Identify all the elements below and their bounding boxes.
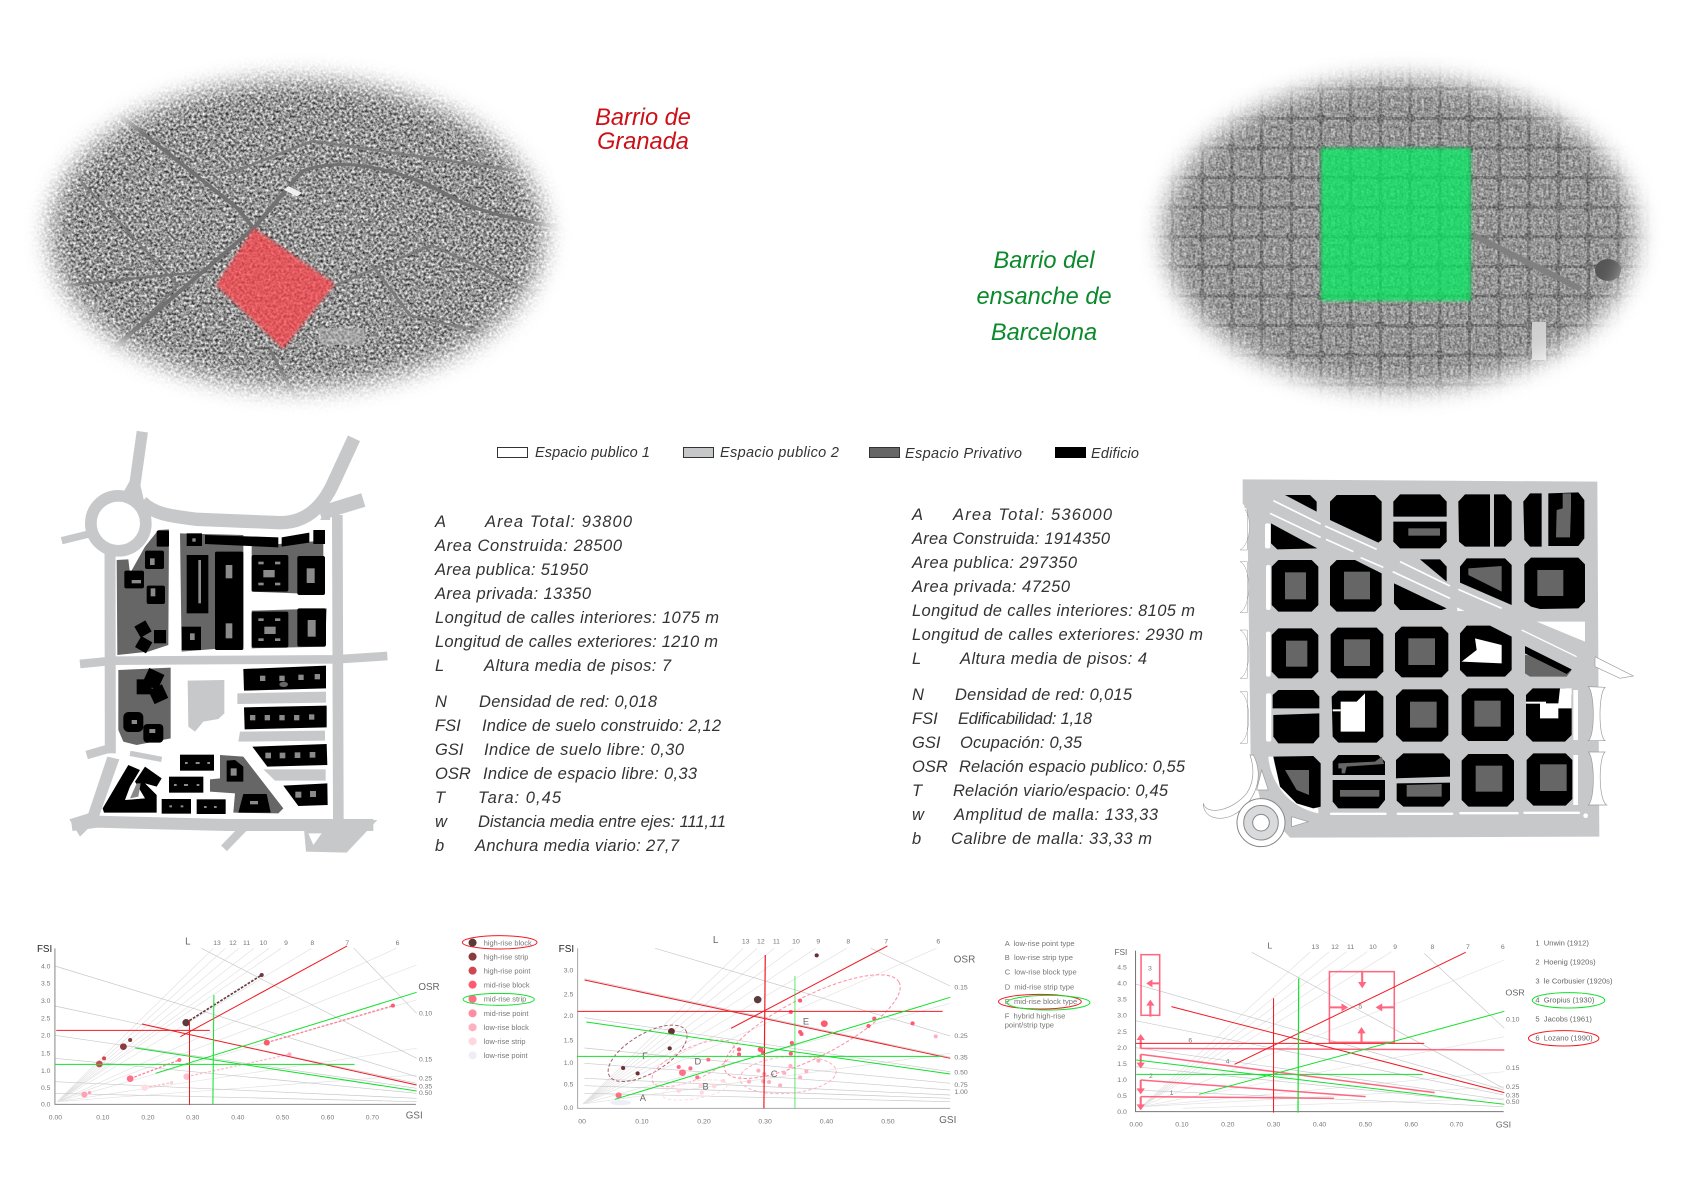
chart 1 axis labels: 11 [243, 940, 250, 947]
chart 2 axis labels: 1.00 [954, 1089, 968, 1096]
chart 1 legend: mid-rise point [484, 1009, 528, 1018]
text block: Granada indicators: b [435, 837, 444, 855]
chart 2 green Barcelona lines [577, 976, 950, 1108]
title: Barrio de Granada: Granada [597, 129, 689, 155]
white sidewalks [1265, 523, 1588, 818]
chart 1 legend: low-rise block [484, 1023, 529, 1032]
chart 2 axis labels: 13 [742, 938, 750, 945]
chart 3 axis labels: 0.40 [1313, 1122, 1326, 1129]
chart 1 legend: mid-rise strip [484, 995, 526, 1004]
chart 1 axis labels: 0.0 [41, 1101, 51, 1108]
chart 2 axis labels: 0.15 [954, 984, 968, 991]
chart 2 axis labels: 0.20 [697, 1118, 711, 1125]
text block: Barcelona indicators: Edificabilidad: 1,18 [958, 710, 1093, 728]
text block: Granada indicators [435, 693, 726, 855]
chart 2 axis labels: 2.0 [564, 1013, 574, 1020]
chart 2 legend: E mid-rise block type [1005, 997, 1077, 1006]
chart 3 axis labels: 0.50 [1359, 1122, 1372, 1129]
text block: Granada indicators: GSI [435, 741, 464, 759]
chart 3 axis labels: 2.5 [1117, 1029, 1127, 1036]
title: Barrio del ensanche de Barcelona [976, 248, 1112, 346]
aerial map: Barcelona Eixample [1146, 60, 1653, 407]
text block: Granada indicators: Indice de espacio libre: 0,33 [483, 765, 698, 783]
chart 2 axis labels: 0.10 [635, 1118, 649, 1125]
chart 3 legend: 4 Gropius (1930) [1535, 995, 1595, 1004]
private space [117, 529, 327, 813]
chart 2 axis labels: 9 [816, 938, 820, 945]
chart 1 axis labels: GSI [406, 1110, 423, 1121]
chart 3 axis labels: 3.0 [1117, 1013, 1127, 1020]
text block: Barcelona areas: A [911, 506, 923, 524]
chart 3 axis labels: 2 [1149, 1073, 1153, 1080]
data text: Barcelona [911, 506, 1203, 848]
text block: Barcelona areas: Area Construida: 1914350 [911, 530, 1111, 548]
text block: Granada indicators: FSI [435, 717, 461, 735]
chart 2 axis labels: 12 [757, 938, 765, 945]
aerial map: Granada neighbourhood [32, 60, 562, 407]
chart 2 axis labels: 3.0 [564, 967, 574, 974]
chart 3 axis labels: 3.5 [1117, 997, 1127, 1004]
chart 3 axis labels: 4.5 [1117, 965, 1127, 972]
roundabout [1237, 799, 1285, 847]
chart 3 axis labels: 8 [1431, 944, 1435, 951]
chart 2 axis labels: 0.50 [881, 1118, 895, 1125]
text block: Granada indicators: OSR [435, 765, 471, 783]
chart 2 legend: D mid-rise strip type [1005, 982, 1074, 991]
chart 1 axis labels: 0.20 [141, 1114, 155, 1121]
road junctions [69, 482, 377, 853]
chart 1 background grid [55, 948, 417, 1104]
title: Barrio del ensanche de Barcelona: Barcelona [991, 320, 1097, 346]
chart 2 axis labels: 0.75 [954, 1082, 968, 1089]
chart 3 red Granada lines [1136, 952, 1504, 1113]
chart 1 axis labels: 0.15 [419, 1057, 432, 1064]
text block: Granada areas: Altura media de pisos: 7 [483, 657, 672, 675]
chart 2 legend: C low-rise block type [1005, 968, 1077, 977]
chart 3 axis labels: 5 [1358, 1003, 1362, 1010]
chart 3 axis labels: 0.15 [1506, 1065, 1520, 1072]
text block: Barcelona indicators: FSI [912, 710, 938, 728]
private courtyards [1285, 493, 1572, 797]
text block: Barcelona areas: Longitud de calles interiores: 8105 m [912, 602, 1195, 620]
chart 3 legend: 3 le Corbusier (1920s) [1535, 976, 1613, 985]
chart 2 axis labels: D [695, 1056, 702, 1066]
chart 2 data points [610, 953, 938, 1105]
chart 1 axis labels: 0.10 [419, 1011, 432, 1018]
text block: Barcelona indicators: Relación viario/espacio: 0,45 [953, 782, 1169, 800]
text block: Granada areas: Area Total: 93800 [484, 513, 633, 531]
chart 3: FSI/GSI historical models [1114, 939, 1613, 1129]
legend: Edificio: Edificio [1091, 446, 1139, 462]
chart 3 axis labels: 7 [1466, 944, 1470, 951]
chart 3 axis labels: 4 [1226, 1058, 1230, 1065]
text block: Barcelona indicators: Calibre de malla: 33,33 m [951, 830, 1152, 848]
chart 1 axis labels: 0.40 [231, 1114, 245, 1121]
open courtyards and gaps [1333, 638, 1572, 732]
chart 1 axis labels: 8 [311, 940, 315, 947]
chart 3 axis labels: 9 [1393, 944, 1397, 951]
chart 2 legend: F hybrid high-rise [1005, 1012, 1065, 1021]
chart 1 legend: high-rise strip [484, 952, 528, 961]
chart 1 axis labels: 0.50 [419, 1090, 432, 1097]
chart 2 axis labels: 0.0 [564, 1105, 574, 1112]
chart 3 axis labels: GSI [1496, 1119, 1511, 1129]
chart 3 axis labels: 13 [1311, 944, 1319, 951]
chart 1 axis labels: 0.25 [419, 1075, 432, 1082]
street outlines and slivers [1203, 510, 1633, 827]
street network [1243, 479, 1599, 838]
chart 2: FSI/GSI urban types [559, 935, 1090, 1126]
text block: Barcelona indicators: Amplitud de malla: 133,33 [953, 806, 1159, 824]
chart 2 background grid [578, 948, 950, 1108]
chart 1 red Granada lines [56, 946, 417, 1105]
chart 1 axis labels: 0.10 [96, 1114, 110, 1121]
chart 1 axis labels: 10 [260, 940, 267, 947]
plan: Barcelona Eixample [1203, 479, 1633, 847]
chart 2 axis labels: 1.0 [564, 1060, 574, 1067]
text block: Granada areas: Longitud de calles exteriores: 1210 m [435, 633, 718, 651]
text block: Granada indicators: Tara: 0,45 [478, 789, 562, 807]
chart 3 axis labels: 1.0 [1117, 1077, 1127, 1084]
chart 1 axis labels: 12 [229, 940, 237, 947]
chart 2 axis labels: C [771, 1069, 778, 1079]
chart 2 axis labels: 0.5 [564, 1081, 574, 1088]
chart 3 axis labels [1114, 940, 1525, 1129]
chart 3 legend: 2 Hoenig (1920s) [1535, 957, 1596, 966]
chart 3 legend: 5 Jacobs (1961) [1535, 1014, 1592, 1023]
chart 2 legend: B low-rise strip type [1005, 953, 1073, 962]
title: Barrio del ensanche de Barcelona: ensanche de [976, 284, 1112, 310]
text block: Barcelona indicators: w [912, 806, 925, 824]
chart 2 axis labels: 10 [792, 938, 800, 945]
chart 2 axis labels: 0.40 [820, 1118, 833, 1125]
text block: Granada indicators: T [435, 789, 447, 807]
chart 2 axis labels: L [713, 935, 719, 946]
text block: Barcelona areas: Area Total: 536000 [952, 506, 1113, 524]
chart 3 axis labels: 0.35 [1506, 1092, 1520, 1099]
chart 3 axis labels: 12 [1331, 944, 1339, 951]
chart 3 legend [1528, 939, 1613, 1046]
text block: Barcelona indicators: Ocupación: 0,35 [960, 734, 1083, 752]
chart 1 legend [462, 936, 537, 1060]
chart 2 axis labels: 0.30 [758, 1118, 772, 1125]
text block: Barcelona areas: Area publica: 297350 [911, 554, 1078, 572]
road network [62, 432, 387, 848]
chart 3 legend: 1 Unwin (1912) [1535, 939, 1589, 948]
chart 1 axis labels: 2.5 [41, 1015, 51, 1022]
chart 3 axis labels: 0.25 [1506, 1084, 1520, 1091]
chart 3 axis labels: 1.5 [1117, 1061, 1127, 1068]
chart 2 axis labels: 8 [846, 938, 850, 945]
text block: Barcelona indicators: Densidad de red: 0,015 [955, 686, 1133, 704]
text block: Barcelona areas [911, 506, 1203, 668]
text block: Granada indicators: N [435, 693, 447, 711]
text block: Granada indicators: Anchura media viario: 27,7 [474, 837, 680, 855]
chart 1 axis labels: 0.30 [186, 1114, 200, 1121]
chart 2 axis labels [559, 935, 975, 1126]
chart 1 axis labels: OSR [418, 982, 440, 993]
chart 1 axis labels: 0.5 [41, 1085, 51, 1092]
chart 2 red Granada lines [578, 946, 950, 1108]
title: Barrio de Granada: Barrio de [595, 105, 691, 131]
chart 1 axis labels: 0.50 [276, 1114, 289, 1121]
chart 3 axis labels: FSI [1114, 948, 1127, 957]
chart 2 axis labels: 00 [578, 1118, 586, 1125]
chart 2 axis labels: F [642, 1051, 648, 1061]
chart 3 axis labels: 6 [1501, 944, 1505, 951]
text block: Barcelona areas: Longitud de calles exteriores: 2930 m [912, 626, 1203, 644]
text block: Granada indicators: Densidad de red: 0,018 [479, 693, 658, 711]
red highlighted area [216, 228, 335, 349]
text block: Granada areas [434, 513, 719, 675]
buildings [103, 530, 328, 814]
chart 2 axis labels: 0.35 [954, 1054, 968, 1061]
chart 1 legend: high-rise block [484, 938, 532, 947]
chart 1 axis labels: 3.5 [41, 981, 51, 988]
chart 2 axis labels: 2.5 [564, 991, 574, 998]
chart 2 axis labels: B [702, 1081, 709, 1091]
legend: Espacio Privativo: Espacio Privativo [905, 446, 1022, 462]
chart 1 axis labels: FSI [37, 944, 52, 955]
chart 2 axis labels: 0.25 [954, 1033, 968, 1040]
text block: Granada areas: Longitud de calles interiores: 1075 m [435, 609, 719, 627]
chart 1 axis labels: 2.0 [41, 1033, 51, 1040]
chart 3 axis labels: 10 [1369, 944, 1377, 951]
text block: Barcelona indicators: N [912, 686, 924, 704]
green highlighted area [1321, 148, 1471, 301]
chart 1 axis labels: 4.0 [41, 963, 51, 970]
chart 1 legend: mid-rise block [484, 980, 530, 989]
chart 3 axis labels: 0.5 [1117, 1093, 1127, 1100]
chart 3 axis labels: 0.50 [1506, 1099, 1520, 1106]
chart 2 axis labels: A [640, 1093, 647, 1103]
text block: Barcelona indicators: GSI [912, 734, 941, 752]
text block: Granada areas: Area privada: 13350 [434, 585, 592, 603]
chart 1 green Barcelona lines [55, 992, 417, 1104]
text block: Barcelona indicators: b [912, 830, 921, 848]
chart 2 axis labels: 0.50 [954, 1070, 968, 1077]
chart 1 axis labels: 3.0 [41, 998, 51, 1005]
chart 1 axis labels: 9 [284, 940, 288, 947]
chart 2 axis labels: OSR [954, 954, 975, 965]
chart 3 axis labels: 0.20 [1221, 1122, 1235, 1129]
chart 1 axis labels: 0.35 [419, 1083, 432, 1090]
chart 2 legend: point/strip type [1005, 1020, 1054, 1029]
text block: Granada indicators: Indice de suelo construido: 2,12 [482, 717, 721, 735]
text block: Barcelona indicators [912, 686, 1186, 848]
chart 3 axis labels: 6 [1188, 1037, 1192, 1044]
chart 3 axis labels: 0.10 [1506, 1017, 1520, 1024]
chart 1: FSI/GSI housing types [37, 936, 537, 1121]
chart 1 axis labels: 0.60 [321, 1114, 334, 1121]
title: Barrio de Granada [595, 105, 691, 155]
chart 2 axis labels: 11 [773, 938, 780, 945]
legend: Edificio [1055, 446, 1139, 462]
chart 3 legend: 6 Lozano (1990) [1535, 1033, 1593, 1042]
chart 1 axis labels: 1.5 [41, 1051, 51, 1058]
chart 3 axis labels: 0.0 [1117, 1109, 1127, 1116]
chart 1 axis labels: 6 [396, 940, 400, 947]
chart 3 axis labels: 3 [1148, 966, 1152, 973]
chart 2 axis labels: 7 [884, 938, 888, 945]
chart 3 model ranges and arrows [1137, 955, 1504, 1110]
chart 3 axis labels: 4.0 [1117, 981, 1127, 988]
chart 3 axis labels: 0.70 [1450, 1122, 1463, 1129]
chart 3 axis labels: 1 [1170, 1090, 1174, 1097]
chart 3 axis labels: 2.0 [1117, 1045, 1127, 1052]
diagonal avenue slots [1270, 501, 1577, 657]
diagonal avenue [1248, 498, 1593, 660]
text block: Granada areas: Area Construida: 28500 [434, 537, 623, 555]
text block: Barcelona areas: L [912, 650, 921, 668]
text block: Granada areas: L [435, 657, 444, 675]
text block: Barcelona indicators: T [912, 782, 924, 800]
text block: Barcelona areas: Area privada: 47250 [911, 578, 1071, 596]
text block: Granada indicators: w [435, 813, 448, 831]
legend [498, 445, 1139, 462]
chart 2 axis labels: E [803, 1016, 809, 1026]
chart 1 axis labels: 7 [345, 940, 349, 947]
chart 3 axis labels: 0.60 [1405, 1122, 1418, 1129]
chart 3 axis labels: 0.30 [1267, 1122, 1281, 1129]
data text: Granada [434, 513, 726, 855]
chart 1 axis labels: 0.00 [49, 1114, 62, 1121]
chart 3 axis labels: 11 [1347, 944, 1354, 951]
chart 2 axis labels: GSI [939, 1115, 956, 1126]
chart 3 axis labels: 0.10 [1175, 1122, 1189, 1129]
chart 2 legend [998, 939, 1090, 1029]
chart 2 axis labels: 1.5 [564, 1037, 574, 1044]
text block: Granada indicators: Indice de suelo libre: 0,30 [484, 741, 685, 759]
plaza and strips: public space 2 [188, 680, 326, 781]
chart 1 legend: low-rise strip [484, 1037, 525, 1046]
chart 2 legend: A low-rise point type [1005, 939, 1075, 948]
blocks [1271, 492, 1585, 808]
chart 3 axis labels: 0.00 [1129, 1122, 1143, 1129]
chart 2 dashed type clusters [599, 956, 914, 1104]
chart 1 legend: high-rise point [484, 966, 530, 975]
chart 1 axis labels: L [185, 937, 191, 948]
text block: Granada indicators: Distancia media entre ejes: 111,11 [478, 813, 726, 831]
chart 1 axis labels [37, 937, 440, 1121]
chart 3 axis labels: L [1267, 940, 1272, 950]
text block: Barcelona indicators: OSR [912, 758, 948, 776]
chart 2 axis labels: FSI [559, 944, 574, 955]
legend: Espacio publico 2: Espacio publico 2 [720, 445, 839, 461]
courtyards [130, 538, 320, 808]
text block: Barcelona areas: Altura media de pisos: 4 [959, 650, 1147, 668]
chart 1 axis labels: 13 [213, 940, 221, 947]
text block: Barcelona indicators: Relación espacio publico: 0,55 [959, 758, 1186, 776]
chart 3 green Barcelona lines [1136, 978, 1504, 1113]
chart 1 axis labels: 0.70 [366, 1114, 379, 1121]
text block: Granada areas: Area publica: 51950 [434, 561, 589, 579]
chart 1 data points [81, 973, 395, 1098]
plan: Granada neighbourhood [62, 432, 387, 853]
chart 1 legend: low-rise point [484, 1051, 528, 1060]
legend: Espacio publico 1: Espacio publico 1 [535, 445, 650, 461]
chart 3 background grid [1136, 951, 1504, 1112]
chart 1 axis labels: 1.0 [41, 1068, 51, 1075]
text block: Granada areas: A [434, 513, 446, 531]
chart 2 axis labels: 6 [936, 938, 940, 945]
chart 3 axis labels: OSR [1505, 988, 1525, 998]
title: Barrio del ensanche de Barcelona: Barrio del [994, 248, 1095, 274]
